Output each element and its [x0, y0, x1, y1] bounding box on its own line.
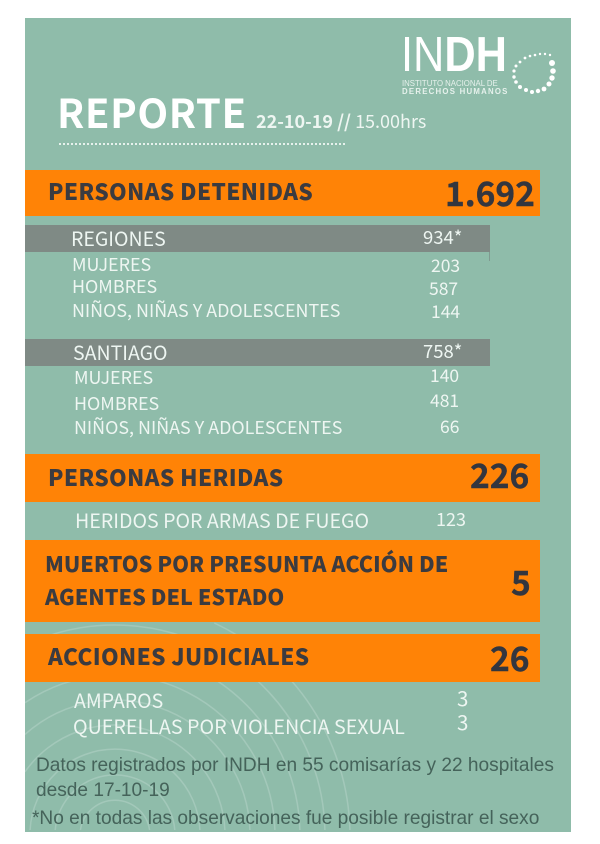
heading: PERSONAS DETENIDAS [48, 175, 313, 207]
title: REPORTE [57, 82, 247, 140]
banner: personas detenidas [25, 170, 540, 216]
mujeres value: 140 [430, 363, 459, 388]
mujeres label: MUJERES [74, 364, 153, 390]
amparos value: 3 [457, 682, 468, 712]
querellas value: 3 [457, 706, 468, 736]
data source note: Datos registrados por INDH en 55 comisarías y 22 hospitales [36, 755, 554, 776]
dotted underline [59, 143, 345, 145]
data source note [36, 755, 554, 800]
row: santiago [25, 339, 490, 366]
tick under regiones bar [489, 252, 490, 261]
row: heridos por armas de fuego [75, 505, 466, 534]
hombres value: 481 [430, 388, 459, 413]
regiones breakdown [72, 251, 460, 324]
value: 934* [423, 224, 462, 250]
number: 5 [511, 556, 531, 605]
number: 1.692 [445, 167, 535, 216]
hombres label: HOMBRES [72, 273, 157, 299]
banner: muertos [25, 540, 540, 622]
santiago breakdown [74, 363, 459, 440]
logo subtitle: DERECHOS HUMANOS [402, 87, 509, 96]
number: 26 [490, 632, 530, 681]
footnote text [32, 755, 554, 829]
number: 226 [470, 449, 529, 498]
ninos label: NIÑOS, NIÑAS Y ADOLESCENTES [72, 297, 340, 323]
mujeres label: MUJERES [72, 251, 151, 277]
mujeres value: 203 [431, 253, 460, 278]
logo dotted circle [512, 52, 556, 94]
label: REGIONES [71, 223, 166, 252]
acciones breakdown [73, 682, 468, 740]
label: SANTIAGO [73, 337, 168, 366]
logo: INDH [401, 28, 556, 96]
heading: ACCIONES JUDICIALES [48, 640, 309, 672]
logo subtitle: INSTITUTO NACIONAL DE [402, 79, 498, 88]
querellas label: QUERELLAS POR VIOLENCIA SEXUAL [73, 711, 405, 740]
heading: PERSONAS HERIDAS [48, 461, 284, 493]
ninos label: NIÑOS, NIÑAS Y ADOLESCENTES [74, 414, 342, 440]
hombres value: 587 [429, 276, 458, 301]
logo wordmark: INDH [401, 28, 507, 82]
banner: personas heridas [25, 454, 540, 502]
value: 758* [423, 338, 462, 364]
heading: AGENTES DEL ESTADO [45, 581, 284, 612]
heading [44, 548, 448, 612]
banner: acciones judiciales [25, 634, 540, 682]
heading: MUERTOS POR PRESUNTA ACCIÓN DE [45, 548, 448, 579]
label: HERIDOS POR ARMAS DE FUEGO [75, 505, 369, 534]
decorative concentric rings [25, 622, 350, 830]
logo subtitle [402, 79, 509, 96]
value: 123 [436, 506, 466, 532]
row: regiones [25, 225, 490, 252]
hombres label: HOMBRES [74, 390, 159, 416]
ninos value: 144 [431, 299, 460, 324]
ninos value: 66 [440, 414, 459, 439]
date and time: 22-10-19 // 15.00hrs [256, 108, 426, 134]
data source note: desde 17-10-19 [36, 780, 170, 800]
amparos label: AMPAROS [74, 685, 163, 714]
asterisk note: *No en todas las observaciones fue posible registrar el sexo [32, 808, 539, 829]
